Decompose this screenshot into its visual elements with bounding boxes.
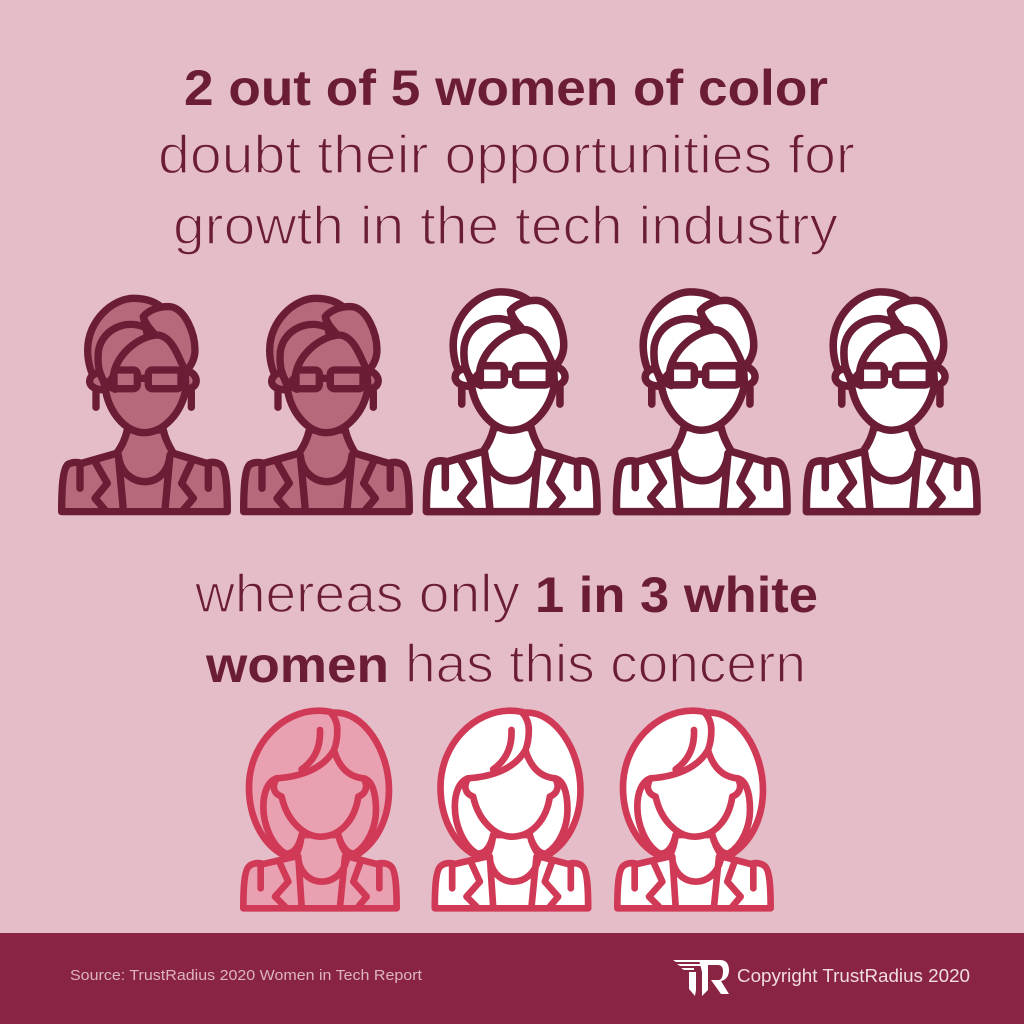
subheading: white women statistic: whereas only (194, 564, 520, 624)
subheading: white women statistic: has this concern (405, 634, 806, 694)
icon: highlighted woman with glasses 1 (62, 298, 227, 512)
title: women of color statistic (158, 60, 855, 256)
footer band (0, 933, 1024, 1024)
title: women of color statistic: 2 out of 5 women of color (184, 60, 828, 116)
title: women of color statistic: growth in the tech industry (173, 196, 838, 256)
icon: white woman with glasses 3 (426, 292, 597, 512)
subheading: white women statistic (194, 564, 818, 694)
title: women of color statistic: doubt their opportunities for (158, 125, 855, 185)
icon: white woman with glasses 5 (806, 292, 977, 512)
icon: white woman 3 (617, 711, 771, 908)
icon: highlighted woman with glasses 2 (244, 298, 409, 512)
icon: white woman with glasses 4 (616, 292, 787, 512)
subheading: white women statistic: 1 in 3 white (535, 567, 818, 623)
source text: Source: TrustRadius 2020 Women in Tech Report (70, 967, 423, 984)
icon: white woman 2 (435, 711, 588, 908)
copyright text: Copyright TrustRadius 2020 (737, 966, 970, 986)
icon: TrustRadius logo (673, 960, 729, 996)
icon: highlighted woman (243, 711, 397, 908)
subheading: white women statistic: women (205, 637, 389, 693)
pictogram: 2 of 5 women of color highlighted (62, 292, 977, 512)
pictogram: 1 of 3 white women highlighted (243, 711, 771, 908)
